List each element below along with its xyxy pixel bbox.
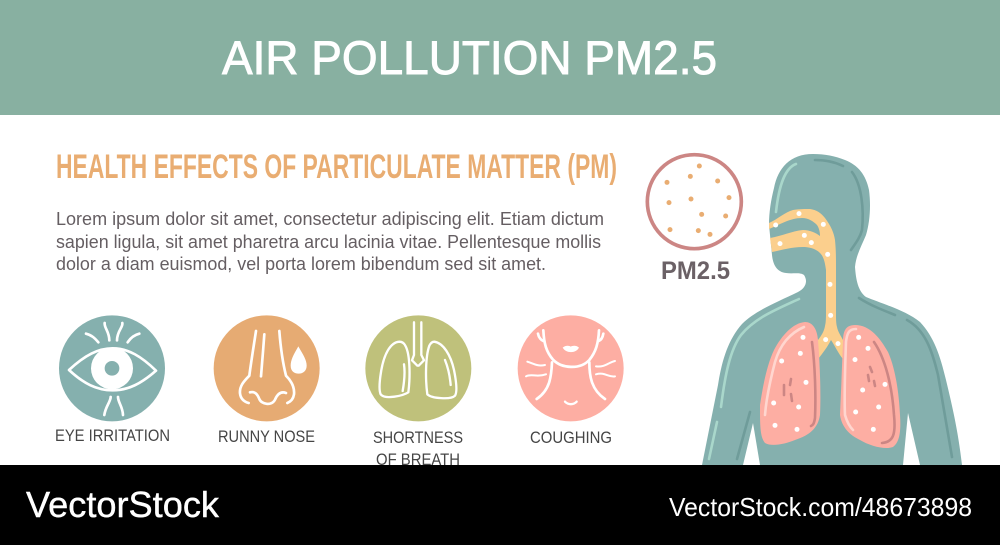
footer bar <box>0 465 1000 545</box>
label: runny nose: RUNNY NOSE <box>218 427 315 446</box>
icon: PM2.5 particle circle <box>647 155 741 249</box>
label: shortness of breath <box>373 428 463 469</box>
body text <box>56 209 604 274</box>
label: shortness of breath: OF BREATH <box>376 450 460 469</box>
label: eye irritation: EYE IRRITATION <box>55 426 170 445</box>
icon: coughing <box>518 315 624 421</box>
icon: shortness of breath <box>365 315 471 421</box>
subheading: HEALTH EFFECTS OF PARTICULATE MATTER (PM) <box>56 148 617 186</box>
title: AIR POLLUTION PM2.5 <box>222 31 717 84</box>
upper airway <box>769 209 843 359</box>
footer image id: VectorStock.com/48673898 <box>669 492 972 522</box>
label: coughing: COUGHING <box>530 428 612 447</box>
right lung <box>840 325 900 448</box>
body text: dolor a diam euismod, vel porta lorem bibendum sed sit amet. <box>56 254 546 274</box>
icon: eye irritation <box>59 315 165 421</box>
label: shortness of breath: SHORTNESS <box>373 428 463 447</box>
label: PM2.5: PM2.5 <box>661 257 730 285</box>
body text: sapien ligula, sit amet pharetra arcu lacinia vitae. Pellentesque mollis <box>56 232 601 252</box>
human body illustration <box>702 154 962 465</box>
lung details <box>765 327 895 443</box>
body text: Lorem ipsum dolor sit amet, consectetur adipiscing elit. Etiam dictum <box>56 209 604 229</box>
body silhouette <box>702 154 962 465</box>
airway particles <box>773 211 840 346</box>
footer brand: VectorStock <box>26 484 220 525</box>
lung particles <box>771 335 887 432</box>
header banner <box>0 0 1000 115</box>
icon: runny nose <box>214 315 320 421</box>
body highlights and shading <box>709 160 952 459</box>
left lung <box>760 322 820 445</box>
